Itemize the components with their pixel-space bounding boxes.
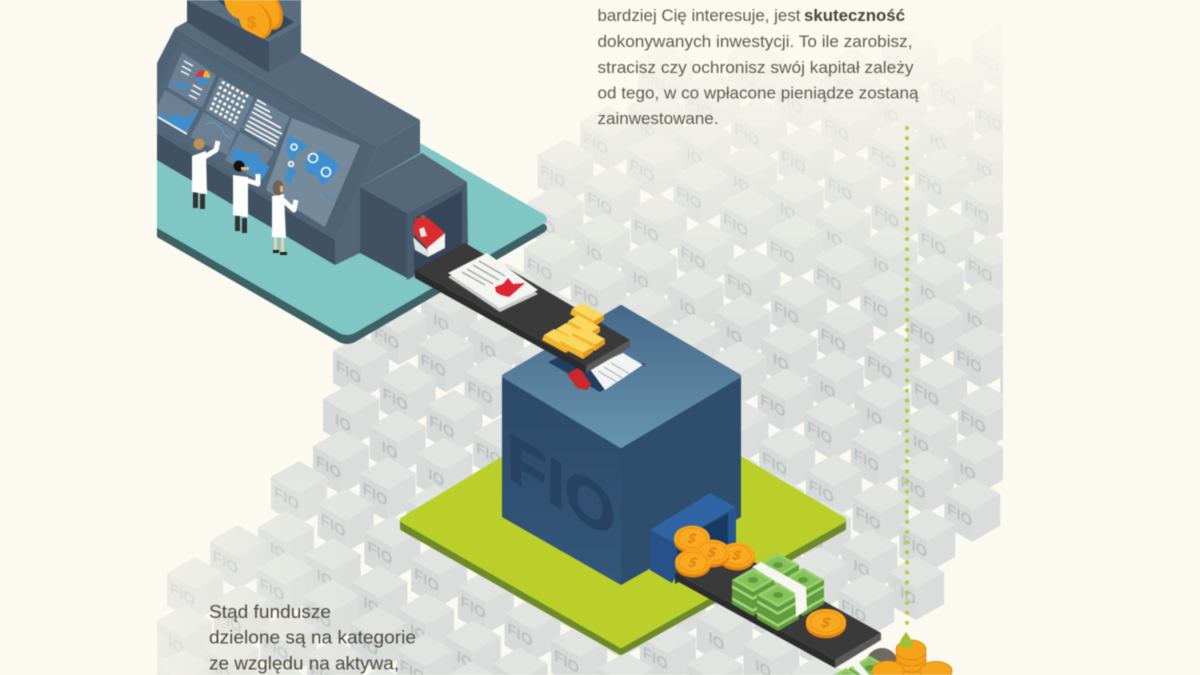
hopper front left <box>187 0 269 73</box>
box opening <box>548 352 646 392</box>
machine gable end <box>335 120 420 265</box>
tunnel right face <box>407 182 468 280</box>
blue hills panel <box>230 146 270 180</box>
coin stacks <box>872 632 952 675</box>
money band <box>752 562 807 617</box>
text block: top paragraph: bardziej Cię interesuje, jest <box>598 6 801 25</box>
chute top <box>650 493 736 543</box>
machine sloped front <box>157 28 377 240</box>
text block: bottom left paragraph: ze względu na aktywa, <box>209 652 399 674</box>
scientist one <box>192 138 218 209</box>
bar chart panel <box>158 109 199 134</box>
chute opening <box>675 510 735 584</box>
text block: top paragraph: zainwestowane. <box>598 109 718 128</box>
coins: $ <box>247 13 257 32</box>
text block: top paragraph: stracisz czy ochronisz swój kapitał zależy <box>598 58 914 77</box>
screen backing <box>157 40 360 228</box>
hopper with coins <box>187 0 301 73</box>
document on conveyor <box>448 253 538 312</box>
dropped document <box>589 353 643 390</box>
machine: research building <box>157 0 468 280</box>
FIO box <box>502 307 741 585</box>
faint curves panel <box>205 122 232 138</box>
tunnel opening <box>414 191 462 274</box>
machine roof <box>175 0 420 147</box>
coins from chute <box>674 526 755 578</box>
hopper front right <box>269 23 301 73</box>
green drop <box>899 632 913 648</box>
bottom cash <box>825 648 898 675</box>
tunnel roof <box>360 153 467 213</box>
chute <box>650 493 736 584</box>
conveyor belt two <box>675 552 881 668</box>
text block: bottom left paragraph: Stąd fundusze <box>209 601 331 622</box>
box FIO letters: FIO <box>507 418 615 554</box>
scientist two <box>233 160 258 233</box>
cash bundles <box>732 553 824 631</box>
text block: bottom left paragraph <box>209 601 416 674</box>
coin on conveyor <box>806 609 846 638</box>
dotted green line <box>905 128 909 625</box>
chute front <box>650 530 677 583</box>
text lines panel <box>245 100 282 146</box>
platform: teal pad <box>157 143 547 344</box>
text block: top paragraph: od tego, w co wpłacone pieniądze zostaną <box>598 84 919 102</box>
hopper opening <box>217 0 294 38</box>
house on conveyor <box>413 214 445 257</box>
machine base front <box>157 133 335 265</box>
scientist three <box>272 180 296 255</box>
pie chart panel <box>171 61 210 99</box>
box right face <box>621 376 741 585</box>
tunnel left face <box>360 187 407 278</box>
text block: top paragraph <box>598 6 919 128</box>
world map panel <box>285 136 340 200</box>
dots panel <box>210 82 249 123</box>
platform: green pad <box>403 388 843 652</box>
text block: top paragraph: skuteczność <box>804 6 905 25</box>
text block: bottom left paragraph: dzielone są na kategorie <box>209 626 416 648</box>
conveyor belt one <box>415 243 630 373</box>
box top face <box>504 307 739 446</box>
box left face <box>502 376 621 585</box>
chute right lip <box>728 507 736 555</box>
background: isometric FIO cube field <box>157 50 1004 675</box>
dashboard panels <box>157 52 360 227</box>
hopper rim <box>187 0 301 42</box>
text block: top paragraph: dokonywanych inwestycji. To ile zarobisz, <box>598 32 912 51</box>
gold bars <box>542 303 605 359</box>
dropped house <box>567 367 591 390</box>
